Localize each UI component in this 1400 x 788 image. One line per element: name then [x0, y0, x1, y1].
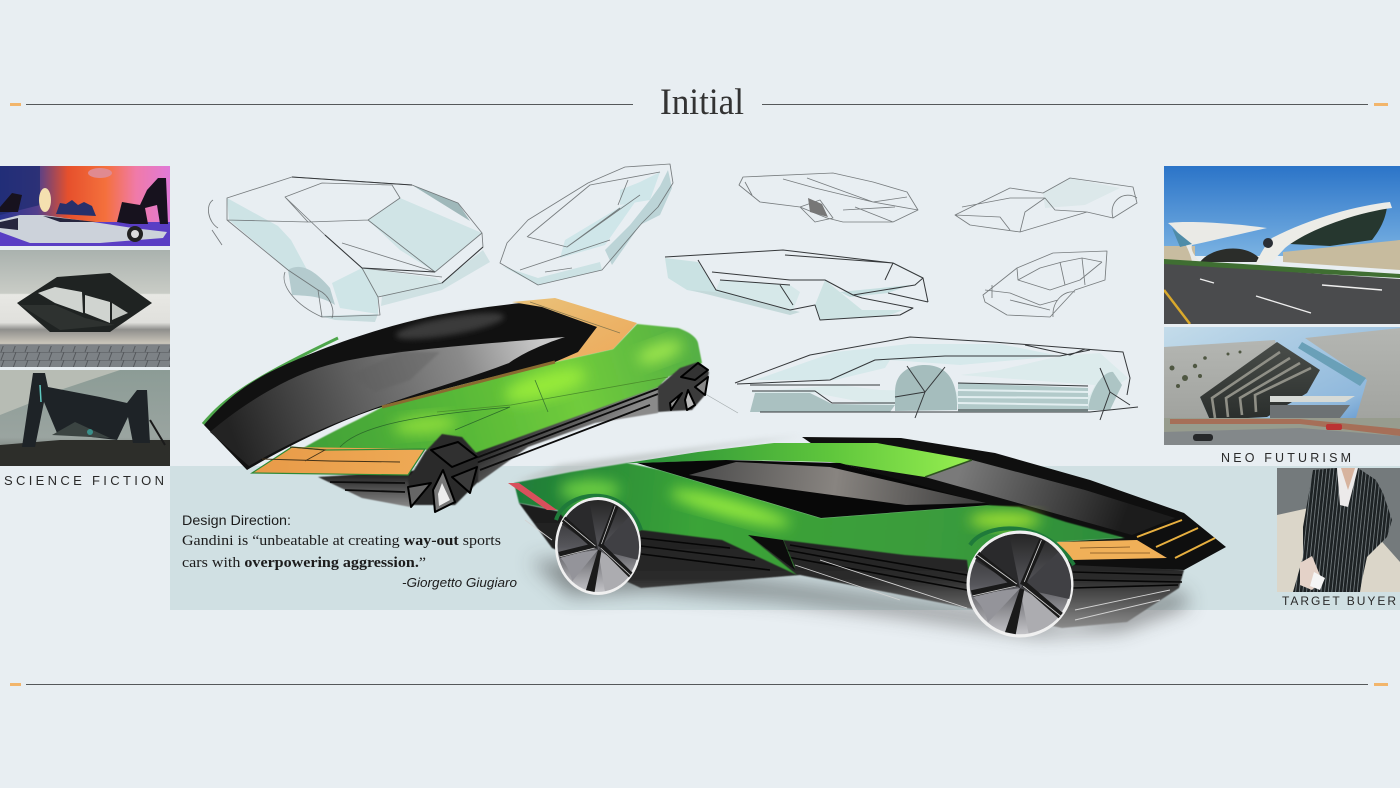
- photo: black pod capsule: [0, 250, 170, 367]
- photo: concrete modern building: [1164, 327, 1400, 445]
- orange roof and hood trim: [252, 298, 637, 475]
- text block: design direction quote: cars with overpowering aggression. ”: [182, 555, 426, 571]
- green bodywork: [514, 443, 1125, 585]
- black roof, hood and cabin: [802, 437, 1226, 570]
- motion streaks: [514, 436, 802, 482]
- car: upper green concept: [203, 298, 709, 512]
- side window: [637, 460, 990, 570]
- sketch: small coupe: [739, 173, 918, 222]
- hood glass highlight: [925, 460, 1175, 535]
- lower skirts: [318, 383, 662, 507]
- label: science fiction: SCIENCE FICTION: [4, 473, 164, 488]
- front wheel: [966, 530, 1074, 638]
- label: target buyer: TARGET BUYER: [1282, 594, 1396, 608]
- photo: target buyer suit: [1277, 468, 1400, 592]
- tinted glasshouse: [204, 299, 600, 470]
- sketch: small top-view car: [500, 164, 673, 285]
- text block: design direction quote: Gandini is “unbeatable at creating way-out sports: [182, 533, 501, 549]
- spiky wheels: [408, 362, 709, 512]
- photo: retro sci-fi painting: [0, 166, 170, 246]
- sketch: large three-quarter wedge: [208, 177, 490, 322]
- text block: design direction quote: [182, 512, 517, 590]
- ground shadow: [530, 560, 1190, 635]
- label: neo futurism: NEO FUTURISM: [1221, 451, 1351, 465]
- photo: dark sci-fi machine: [0, 370, 170, 466]
- panel: design direction band: [170, 466, 1400, 610]
- text block: design direction quote: Design Direction:: [182, 512, 291, 528]
- sketch: small outline car: [983, 251, 1107, 317]
- car: lower hero green concept: [508, 436, 1226, 638]
- wheel arches: [556, 496, 1074, 565]
- bottom divider: [10, 683, 1388, 686]
- text block: design direction quote: -Giorgetto Giugiaro: [402, 576, 517, 590]
- rear wheel: [555, 497, 641, 595]
- sketch: low side car: [955, 178, 1137, 232]
- sketch: flat wide car: [665, 250, 928, 320]
- title with divider lines: [10, 82, 1388, 123]
- photo: neo-futurist terminal: [1164, 166, 1400, 324]
- sketch: long side profile: [702, 337, 1138, 420]
- green bodywork: [203, 324, 702, 470]
- lower stripes: [519, 503, 1184, 628]
- red tail light: [508, 483, 557, 510]
- orange nose and yellow lines: [1057, 520, 1215, 560]
- title with divider lines: Initial: [660, 82, 744, 123]
